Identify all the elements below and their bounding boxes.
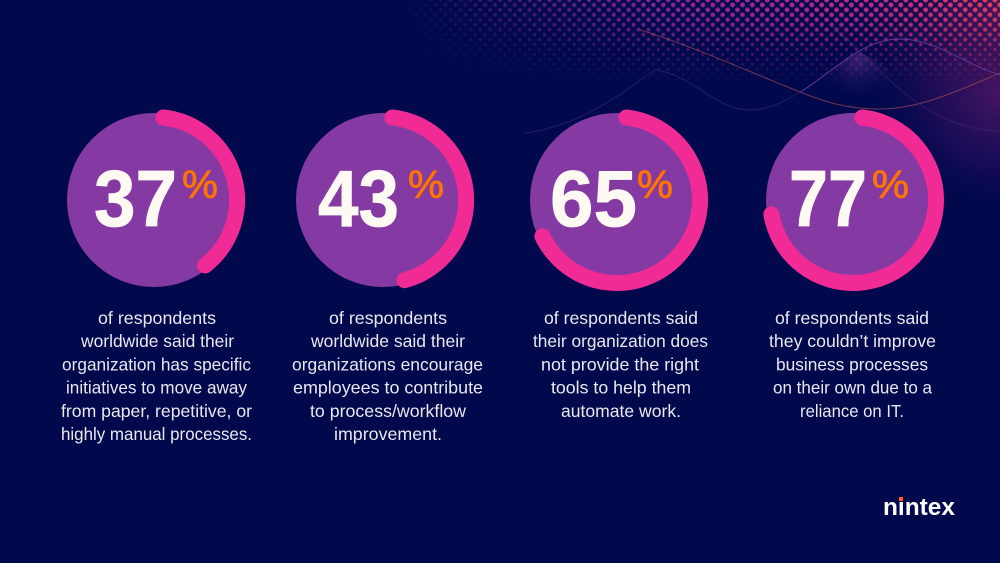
description: 43 percent: organizations encourage: [292, 354, 483, 374]
description: 65 percent: automate work.: [561, 401, 681, 421]
description: 37 percent: [61, 308, 252, 444]
description: 37 percent: highly manual processes.: [61, 424, 252, 444]
value: 65%: 65: [550, 154, 637, 243]
description: 65 percent: [533, 308, 708, 421]
description: 37 percent: of respondents: [98, 308, 216, 328]
value: 43%: %: [408, 164, 444, 207]
description: 43 percent: to process/workflow: [310, 401, 466, 421]
description: 43 percent: employees to contribute: [293, 378, 483, 398]
description: 77 percent: of respondents said: [775, 308, 929, 328]
description: 43 percent: of respondents: [329, 308, 447, 328]
description: 77 percent: [769, 308, 936, 421]
panel: 65 percent: [530, 113, 708, 421]
description: 65 percent: tools to help them: [551, 378, 691, 398]
decorative halftone and wave graphic: [380, 0, 1000, 230]
description: 43 percent: worldwide said their: [310, 331, 465, 351]
panel: 77 percent: [766, 113, 940, 421]
description: 77 percent: business processes: [776, 354, 928, 374]
donut: 37 percent: [67, 113, 241, 287]
value: 77%: 77: [789, 154, 867, 243]
description: 65 percent: of respondents said: [544, 308, 698, 328]
logo: nintex: nintex: [883, 494, 955, 521]
description: 65 percent: not provide the right: [541, 354, 699, 374]
description: 77 percent: reliance on IT.: [800, 401, 904, 421]
description: 37 percent: worldwide said their: [80, 331, 234, 351]
value: 77%: %: [872, 164, 909, 207]
description: 77 percent: on their own due to a: [773, 378, 932, 398]
value: 37%: 37: [94, 154, 177, 243]
description: 37 percent: initiatives to move away: [66, 378, 247, 398]
donut: 77 percent: [766, 113, 940, 287]
description: 37 percent: from paper, repetitive, or: [61, 401, 252, 421]
value: 37%: %: [182, 164, 218, 207]
panel: 37 percent: [61, 113, 252, 444]
donut: 43 percent: [296, 113, 470, 287]
donut: 65 percent: [530, 113, 704, 287]
description: 77 percent: they couldn’t improve: [769, 331, 936, 351]
panel: 43 percent: [292, 113, 483, 444]
value: 43%: 43: [318, 154, 399, 243]
description: 65 percent: their organization does: [533, 331, 708, 351]
description: 43 percent: improvement.: [334, 424, 442, 444]
description: 37 percent: organization has specific: [62, 354, 251, 374]
description: 43 percent: [292, 308, 483, 444]
value: 65%: %: [637, 164, 673, 207]
